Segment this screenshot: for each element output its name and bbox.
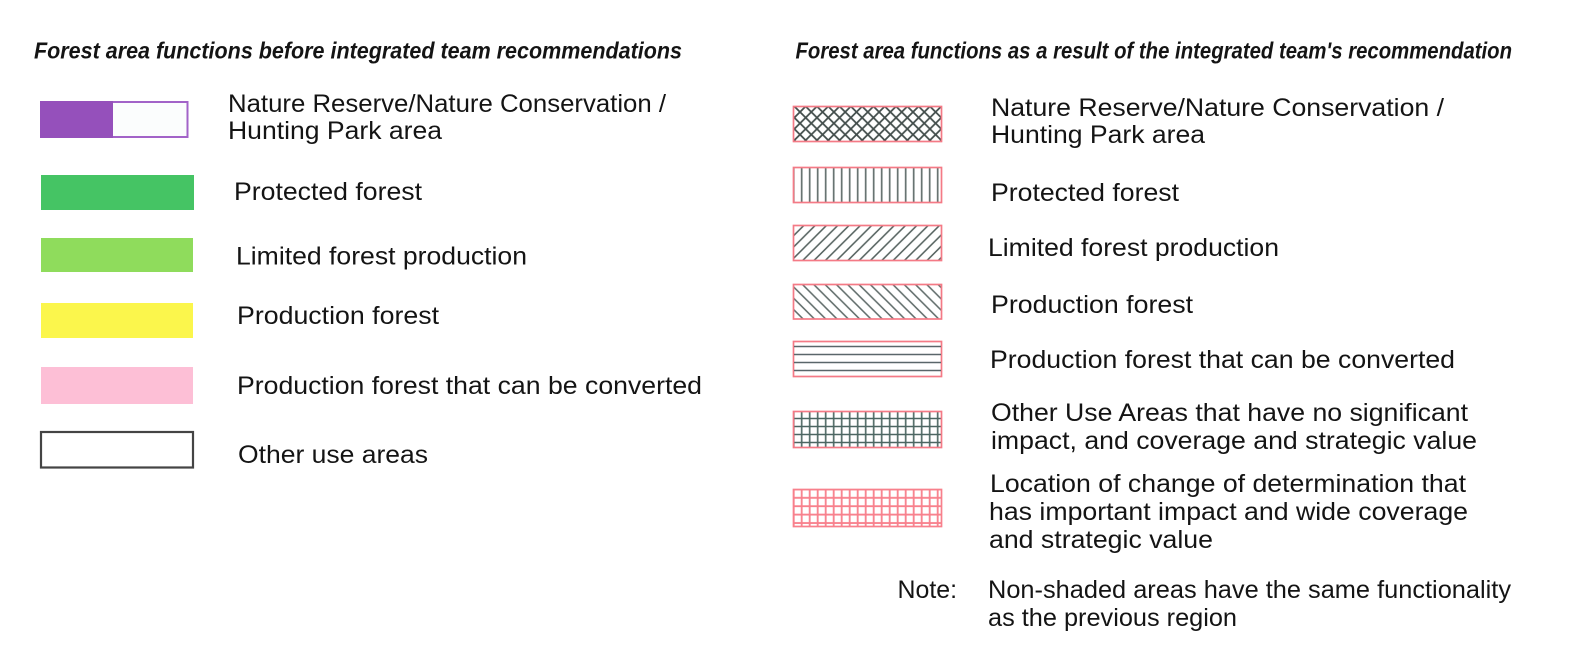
legend item: production forest, back diagonal hatch: Production forest	[991, 291, 1193, 319]
legend item: nature reserve, cross hatch: Hunting Park area	[991, 121, 1205, 149]
note: as the previous region	[988, 604, 1237, 632]
legend item: other use areas, dark grid	[794, 399, 1477, 455]
legend item: nature reserve	[40, 90, 666, 145]
legend item: limited forest production, diagonal hatch: Limited forest production	[988, 234, 1279, 262]
legend item: nature reserve, cross hatch: Nature Reserve/Nature Conservation /	[991, 94, 1444, 122]
heading: after recommendation: Forest area functions as a result of the integrated team's recommendation	[796, 38, 1512, 64]
legend item: protected forest, vertical hatch	[794, 168, 1179, 207]
legend item: production forest: Production forest	[237, 302, 439, 330]
legend item: protected forest, vertical hatch: Protected forest	[991, 179, 1179, 207]
legend item: limited forest production, diagonal hatch	[794, 226, 1279, 262]
legend item: other use areas, dark grid: impact, and coverage and strategic value	[991, 427, 1477, 455]
legend item: location of change, red grid: Location of change of determination that	[990, 470, 1466, 498]
legend item: nature reserve: Nature Reserve/Nature Conservation /	[228, 90, 666, 118]
legend item: location of change, red grid	[794, 470, 1468, 554]
legend item: limited forest production	[41, 238, 527, 272]
legend item: convertible production forest, horizontal lines: Production forest that can be converted	[990, 346, 1455, 374]
panel: forest functions after recommendations	[794, 38, 1512, 632]
legend item: production forest, back diagonal hatch	[794, 284, 1193, 319]
legend item: convertible production forest: Production forest that can be converted	[237, 372, 702, 400]
legend item: convertible production forest, horizontal lines	[794, 342, 1455, 376]
note: Non-shaded areas have the same functionality	[988, 576, 1512, 604]
heading: before recommendations: Forest area functions before integrated team recommendations	[34, 38, 682, 64]
legend item: other use areas: Other use areas	[238, 441, 428, 469]
legend item: nature reserve, cross hatch	[794, 94, 1444, 149]
legend item: nature reserve: Hunting Park area	[228, 117, 442, 145]
legend item: other use areas, dark grid: Other Use Areas that have no significant	[991, 399, 1468, 427]
note: Note:	[898, 576, 957, 604]
panel: forest functions before recommendations	[34, 38, 702, 469]
legend item: protected forest: Protected forest	[234, 178, 422, 206]
legend item: limited forest production: Limited forest production	[236, 242, 527, 270]
legend item: location of change, red grid: has important impact and wide coverage	[989, 498, 1468, 526]
legend item: other use areas	[41, 432, 428, 469]
legend item: protected forest	[41, 175, 422, 210]
legend item: production forest	[41, 302, 439, 338]
note	[898, 576, 1512, 632]
legend item: convertible production forest	[41, 367, 702, 404]
legend item: location of change, red grid: and strategic value	[989, 526, 1213, 554]
